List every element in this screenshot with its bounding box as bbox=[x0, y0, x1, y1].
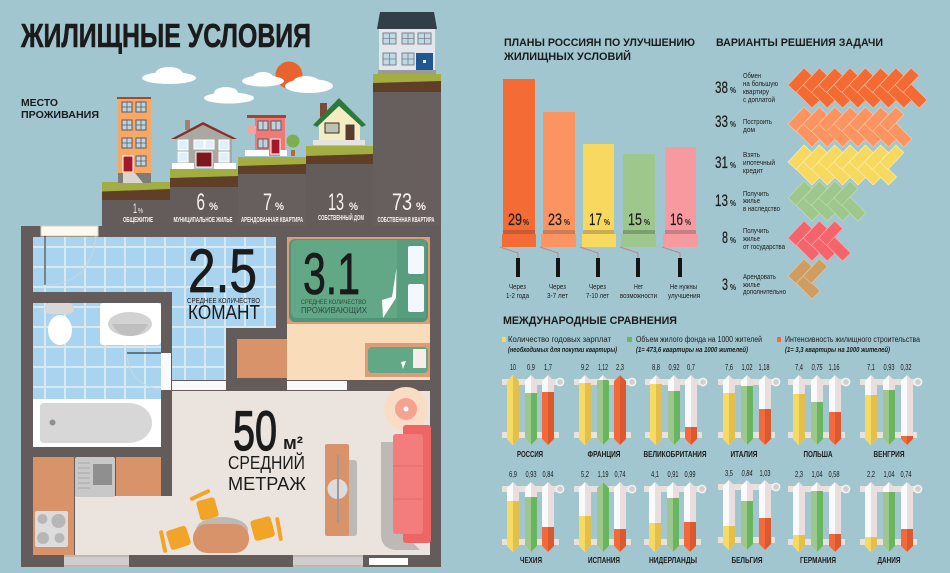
label: private house 13%: % bbox=[349, 201, 358, 213]
radiator: Россия: 10 bbox=[510, 362, 516, 372]
bar: 15%: возможности bbox=[620, 291, 657, 300]
bar: 29%: % bbox=[523, 217, 529, 227]
radiator: Нидерланды: 0,99 bbox=[684, 469, 696, 479]
bar: 16%: % bbox=[685, 217, 691, 227]
row: inherit 13%: жилье bbox=[743, 196, 760, 205]
legend: housing stock: Объем жилого фонда на 1000 жителей bbox=[636, 335, 762, 344]
chart: paint roller bars bbox=[500, 79, 700, 300]
bar: 16% bbox=[662, 147, 700, 300]
legend: construction bbox=[777, 335, 920, 354]
row: inherit 13% bbox=[715, 181, 866, 221]
stat: area 50 m2: МЕТРАЖ bbox=[228, 474, 306, 494]
label: municipal 6% bbox=[174, 189, 232, 224]
radiator: Германия: 2,3 bbox=[795, 469, 803, 479]
label: own apartment 73%: СОБСТВЕННАЯ КВАРТИРА bbox=[378, 215, 435, 224]
bar: 15%: % bbox=[644, 217, 650, 227]
radiator: Испания: ИСПАНИЯ bbox=[588, 555, 620, 565]
bar: 29% bbox=[500, 79, 536, 300]
bar: 29%: Через bbox=[509, 282, 526, 291]
icon: private house bbox=[313, 98, 366, 145]
radiator: Германия: ГЕРМАНИЯ bbox=[800, 555, 836, 565]
row: state 8%: 8 bbox=[722, 228, 728, 247]
legend: construction: (1= 3,3 квартиры на 1000 жителей) bbox=[785, 345, 890, 354]
label: municipal 6%: МУНИЦИПАЛЬНОЕ ЖИЛЬЕ bbox=[174, 215, 232, 224]
stat: rooms 2.5 bbox=[187, 237, 260, 324]
heading: plans: ПЛАНЫ РОССИЯН ПО УЛУЧШЕНИЮ bbox=[504, 37, 695, 49]
heading: international comparison: МЕЖДУНАРОДНЫЕ СРАВНЕНИЯ bbox=[503, 315, 677, 327]
row: exchange 38%: % bbox=[730, 85, 736, 95]
icon: sun and clouds bbox=[142, 62, 333, 104]
furniture: tv stand bbox=[325, 444, 357, 536]
icon: rented apartment building bbox=[245, 115, 300, 156]
label: private house 13% bbox=[318, 189, 364, 222]
bar: 15% bbox=[620, 154, 657, 300]
bar: 23%: Через bbox=[549, 282, 566, 291]
windows: bottom bbox=[64, 555, 408, 567]
radiator: Польша bbox=[788, 362, 850, 459]
row: inherit 13%: Получить bbox=[743, 189, 769, 198]
radiator: Бельгия: 3,5 bbox=[725, 468, 733, 478]
radiator: Дания bbox=[860, 469, 922, 565]
row: build 33% bbox=[715, 107, 912, 147]
fixture: toilet bbox=[45, 303, 74, 345]
radiator: Испания bbox=[574, 469, 636, 565]
bar: 23%: % bbox=[564, 217, 570, 227]
fixture: sink counter bbox=[100, 303, 161, 345]
radiator: Венгрия: 0,32 bbox=[900, 362, 912, 372]
label: rented 7%: % bbox=[275, 201, 284, 213]
chart: radiators bbox=[502, 362, 922, 565]
radiator: Франция: ФРАНЦИЯ bbox=[588, 449, 620, 459]
radiator: Бельгия bbox=[718, 468, 780, 565]
icon: dormitory building bbox=[117, 97, 151, 183]
radiator: Бельгия: 1,03 bbox=[760, 468, 771, 478]
radiator: Чехия: 0,84 bbox=[542, 469, 554, 479]
label: rented 7% bbox=[241, 189, 303, 224]
row: state 8%: Получить bbox=[743, 226, 769, 235]
row: inherit 13%: 13 bbox=[715, 191, 728, 210]
radiator: Польша: 7,4 bbox=[795, 362, 803, 372]
row: exchange 38% bbox=[715, 68, 927, 108]
row: build 33%: Построить bbox=[743, 117, 772, 126]
radiator: Бельгия: 0,84 bbox=[742, 468, 753, 478]
radiator: Бельгия: БЕЛЬГИЯ bbox=[732, 555, 762, 565]
row: state 8%: жилье bbox=[743, 234, 760, 243]
radiator: Испания: 5,2 bbox=[581, 469, 589, 479]
row: build 33%: дом bbox=[743, 125, 755, 134]
radiator: Нидерланды: 4,1 bbox=[651, 469, 659, 479]
row: rent 3%: дополнительно bbox=[743, 287, 786, 296]
radiator: Великобритания bbox=[644, 362, 707, 459]
label: own apartment 73%: % bbox=[416, 201, 426, 213]
legend bbox=[502, 335, 920, 354]
radiator: Россия: 0,9 bbox=[527, 362, 535, 372]
kitchen sink bbox=[75, 457, 115, 497]
radiator: Россия: 1,7 bbox=[544, 362, 552, 372]
radiator: Франция: 1,12 bbox=[598, 362, 608, 372]
row: inherit 13%: в наследство bbox=[743, 204, 780, 213]
bar: 17%: % bbox=[604, 217, 610, 227]
row: mortgage 31%: % bbox=[730, 160, 736, 170]
room: bathroom bbox=[33, 303, 161, 399]
legend: housing stock bbox=[627, 335, 762, 354]
heading: plans: ЖИЛИЩНЫХ УСЛОВИЙ bbox=[503, 50, 631, 63]
row: state 8% bbox=[722, 221, 851, 261]
radiator: Польша: 0,75 bbox=[812, 362, 823, 372]
row: state 8%: % bbox=[730, 235, 736, 245]
row: rent 3%: жилье bbox=[743, 280, 760, 289]
row: mortgage 31% bbox=[715, 145, 904, 185]
label: own apartment 73% bbox=[378, 189, 435, 224]
row: rent 3%: % bbox=[730, 282, 736, 292]
radiator: Чехия: 6,9 bbox=[509, 469, 517, 479]
stat: residents 3.1: СРЕДНЕЕ КОЛИЧЕСТВО bbox=[301, 299, 366, 306]
radiator: Чехия: ЧЕХИЯ bbox=[520, 555, 542, 565]
furniture: sofa bbox=[381, 425, 431, 550]
label: rented 7%: 7 bbox=[263, 189, 272, 216]
row: mortgage 31%: ипотечный bbox=[743, 158, 775, 167]
door: white bedroom door bbox=[287, 381, 347, 390]
bed: small bbox=[365, 343, 430, 377]
radiator: Великобритания: 0,7 bbox=[687, 362, 695, 372]
radiator: Германия: 1,04 bbox=[812, 469, 823, 479]
row: mortgage 31%: кредит bbox=[743, 166, 763, 175]
wardrobe bbox=[237, 339, 287, 378]
label: private house 13%: 13 bbox=[328, 189, 344, 216]
bar: 16%: улучшения bbox=[668, 291, 700, 300]
row: rent 3%: Арендовать bbox=[743, 272, 776, 281]
stat: area 50 m2 bbox=[228, 399, 306, 494]
label: own apartment 73%: 73 bbox=[392, 189, 412, 216]
door: bathroom bbox=[127, 353, 171, 390]
legend: salaries: Количество годовых зарплат bbox=[508, 335, 611, 344]
stat: rooms 2.5: КОМАНТ bbox=[188, 302, 260, 324]
bar: 17%: 17 bbox=[589, 210, 602, 229]
label: dormitory 1%: 1 bbox=[133, 200, 137, 216]
radiator: Нидерланды bbox=[644, 469, 706, 565]
radiator: Италия: ИТАЛИЯ bbox=[730, 449, 758, 459]
row: exchange 38%: на большую bbox=[743, 79, 778, 88]
radiator: Испания: 1,19 bbox=[598, 469, 609, 479]
radiator: Франция bbox=[574, 362, 636, 459]
radiator: Великобритания: 0,92 bbox=[668, 362, 680, 372]
radiator: Россия: РОССИЯ bbox=[517, 449, 543, 459]
label: private house 13%: СОБСТВЕННЫЙ ДОМ bbox=[318, 213, 364, 222]
stat: area 50 m2: м² bbox=[283, 433, 303, 453]
radiator: Германия bbox=[788, 469, 850, 565]
stat: residents 3.1: 3.1 bbox=[303, 242, 360, 307]
radiator: Италия: 1,02 bbox=[742, 362, 753, 372]
heading: place of residence: ПРОЖИВАНИЯ bbox=[21, 109, 99, 121]
radiator: Нидерланды: НИДЕРЛАНДЫ bbox=[649, 555, 697, 565]
row: exchange 38%: Обмен bbox=[743, 71, 761, 80]
legend: construction: Интенсивность жилищного строительства bbox=[785, 335, 920, 344]
radiator: Польша: ПОЛЬША bbox=[804, 449, 832, 459]
row: exchange 38%: 38 bbox=[715, 78, 728, 97]
panel: floor plan bbox=[21, 226, 441, 567]
fixture: bath bbox=[33, 399, 161, 447]
radiator: Испания: 0,74 bbox=[614, 469, 626, 479]
icon: municipal house bbox=[171, 120, 237, 169]
radiator: Дания: ДАНИЯ bbox=[878, 555, 900, 565]
chart: herringbone options bbox=[715, 68, 927, 299]
stat: area 50 m2: СРЕДНИЙ bbox=[228, 452, 305, 473]
bar: 15%: 15 bbox=[628, 210, 642, 229]
radiator: Нидерланды: 0,91 bbox=[668, 469, 679, 479]
radiator: Венгрия: 0,93 bbox=[884, 362, 895, 372]
bar: 17% bbox=[580, 144, 616, 300]
radiator: Дания: 2,2 bbox=[867, 469, 875, 479]
radiator: Великобритания: 8,8 bbox=[652, 362, 660, 372]
row: rent 3% bbox=[722, 259, 827, 299]
radiator: Венгрия: ВЕНГРИЯ bbox=[874, 449, 904, 459]
radiator: Чехия bbox=[502, 469, 564, 565]
row: inherit 13%: % bbox=[730, 198, 736, 208]
label: dormitory 1% bbox=[123, 200, 153, 224]
radiator: Россия bbox=[502, 362, 564, 459]
legend: salaries: (необходимых для покупки квартиры) bbox=[508, 345, 617, 354]
bar: 23% bbox=[540, 112, 576, 300]
label: municipal 6%: 6 bbox=[196, 189, 205, 216]
radiator: Италия: 7,6 bbox=[725, 362, 733, 372]
fixture: lamp bbox=[384, 387, 428, 431]
bar: 23%: 3-7 лет bbox=[547, 291, 568, 300]
bar: 29%: 29 bbox=[508, 210, 522, 229]
bar: 16%: Не нужны bbox=[670, 282, 697, 291]
bar: 29%: 1-2 года bbox=[506, 291, 530, 300]
room: living room floor bbox=[75, 391, 430, 555]
radiator: Чехия: 0,93 bbox=[526, 469, 537, 479]
title: ЖИЛИЩНЫЕ УСЛОВИЯ bbox=[20, 17, 311, 54]
row: mortgage 31%: 31 bbox=[715, 153, 728, 172]
radiator: Дания: 1,04 bbox=[884, 469, 895, 479]
radiator: Франция: 2,3 bbox=[616, 362, 624, 372]
radiator: Венгрия bbox=[860, 362, 922, 459]
radiator: Италия: 1,18 bbox=[758, 362, 770, 372]
stat: area 50 m2: 50 bbox=[233, 399, 277, 462]
legend: housing stock: (1= 473,6 квартиры на 1000 жителей) bbox=[636, 345, 748, 354]
chart: residence steps bbox=[102, 74, 441, 234]
kitchen cabinets bbox=[33, 457, 161, 555]
row: exchange 38%: квартиру bbox=[743, 87, 769, 96]
radiator: Франция: 9,2 bbox=[581, 362, 589, 372]
heading: place of residence: МЕСТО bbox=[21, 97, 58, 109]
bar: 17%: 7-10 лет bbox=[586, 291, 609, 300]
row: mortgage 31%: Взять bbox=[743, 150, 760, 159]
label: dormitory 1%: ОБЩЕЖИТИЕ bbox=[123, 215, 153, 224]
row: rent 3%: 3 bbox=[722, 275, 728, 294]
stat: residents 3.1: ПРОЖИВАЮЩИХ bbox=[301, 305, 367, 315]
radiator: Италия bbox=[718, 362, 780, 459]
bed: large bbox=[287, 237, 430, 324]
radiator: Польша: 1,16 bbox=[828, 362, 840, 372]
heading: solutions: ВАРИАНТЫ РЕШЕНИЯ ЗАДАЧИ bbox=[716, 37, 883, 49]
row: exchange 38%: с доплатой bbox=[743, 95, 775, 104]
label: municipal 6%: % bbox=[209, 201, 218, 213]
radiator: Венгрия: 7,1 bbox=[867, 362, 875, 372]
furniture: dining set bbox=[159, 489, 283, 553]
room: blue main room bbox=[33, 237, 276, 380]
radiator: Германия: 0,58 bbox=[828, 469, 840, 479]
row: build 33%: 33 bbox=[715, 112, 728, 131]
legend: salaries bbox=[502, 335, 617, 354]
icon: apartment house bbox=[377, 12, 437, 74]
stat: rooms 2.5: СРЕДНЕЕ КОЛИЧЕСТВО bbox=[187, 298, 260, 305]
bar: 23%: 23 bbox=[548, 210, 562, 229]
bar: 17%: Через bbox=[589, 282, 606, 291]
bar: 16%: 16 bbox=[670, 210, 683, 229]
radiator: Дания: 0,74 bbox=[900, 469, 912, 479]
radiator: Великобритания: ВЕЛИКОБРИТАНИЯ bbox=[644, 449, 706, 459]
kitchen stove bbox=[35, 511, 68, 547]
stat: rooms 2.5: 2.5 bbox=[188, 237, 257, 305]
row: state 8%: от государства bbox=[743, 242, 786, 251]
strip: white threshold bbox=[172, 381, 226, 390]
room: peach bedroom bbox=[287, 237, 430, 380]
row: build 33%: % bbox=[730, 119, 736, 129]
window: top bbox=[41, 226, 98, 285]
bar: 15%: Нет bbox=[634, 282, 643, 291]
label: dormitory 1%: % bbox=[138, 208, 143, 215]
label: rented 7%: АРЕНДОВАННАЯ КВАРТИРА bbox=[241, 215, 303, 224]
